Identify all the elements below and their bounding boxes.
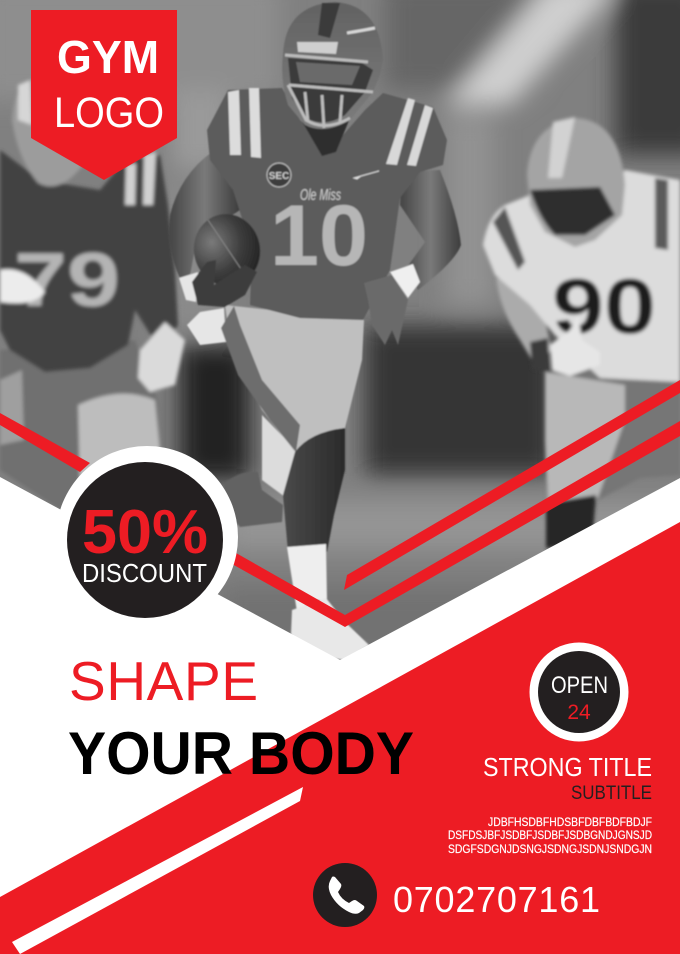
jersey — [207, 88, 447, 320]
back thigh — [262, 415, 296, 500]
white diagonal stripe — [12, 787, 303, 954]
phone number: 0702707161 — [393, 879, 600, 920]
back leg — [224, 472, 283, 527]
hand right — [364, 275, 408, 345]
heading: shape your body: YOUR BODY — [68, 720, 414, 787]
shoe — [291, 598, 369, 660]
photo: right player — [483, 117, 680, 548]
glove behind — [187, 308, 226, 345]
small body text: DSFDSJBFJSDBFJSDBFJSDBGNDJGNSJD — [448, 830, 652, 842]
red chevron line — [232, 421, 680, 627]
sock — [287, 544, 327, 612]
gym logo banner — [31, 10, 177, 180]
heading: shape your body — [68, 650, 414, 787]
red line: upper right — [344, 380, 680, 590]
discount badge: DISCOUNT — [82, 558, 207, 588]
red lower panel — [0, 522, 680, 954]
small body text: JDBFHSDBFHDSBFDBFBDFBDJF — [488, 817, 652, 829]
gym logo banner: GYM — [57, 31, 159, 83]
heading: shape your body: SHAPE — [69, 650, 258, 712]
photo: blurred stadium background — [0, 0, 680, 665]
icon: phone — [313, 863, 377, 927]
photo: right player: 90 — [552, 262, 656, 350]
discount badge — [56, 446, 238, 628]
wristband right — [390, 264, 420, 298]
photo: main running player: SEC — [269, 171, 289, 182]
helmet — [282, 2, 383, 129]
front shin — [283, 428, 345, 552]
football — [187, 208, 267, 292]
pants — [225, 305, 364, 452]
hand on ball — [192, 260, 257, 307]
photo: left player — [0, 78, 185, 510]
photo: main running player — [169, 2, 461, 660]
strong title: STRONG TITLE — [483, 752, 652, 782]
subtitle: SUBTITLE — [571, 783, 652, 804]
photo: main running player: Ole Miss — [300, 187, 341, 204]
white chevron panel — [0, 477, 680, 954]
jersey number and marks: 10 — [270, 188, 368, 284]
small body text — [448, 817, 652, 856]
arms — [169, 152, 240, 278]
small body text: SDGFSDGNJDSNGJSDNGJSDNJSNDGJN — [448, 844, 652, 856]
wristband left — [179, 272, 198, 302]
open 24 badge: OPEN — [551, 672, 608, 699]
open 24 badge: 24 — [567, 701, 591, 724]
red line: upper left — [0, 413, 90, 472]
neck — [300, 118, 350, 156]
photo: left player: 79 — [14, 238, 120, 323]
open 24 badge — [530, 642, 628, 742]
discount badge: 50% — [82, 498, 208, 567]
gym logo banner: LOGO — [54, 89, 164, 137]
